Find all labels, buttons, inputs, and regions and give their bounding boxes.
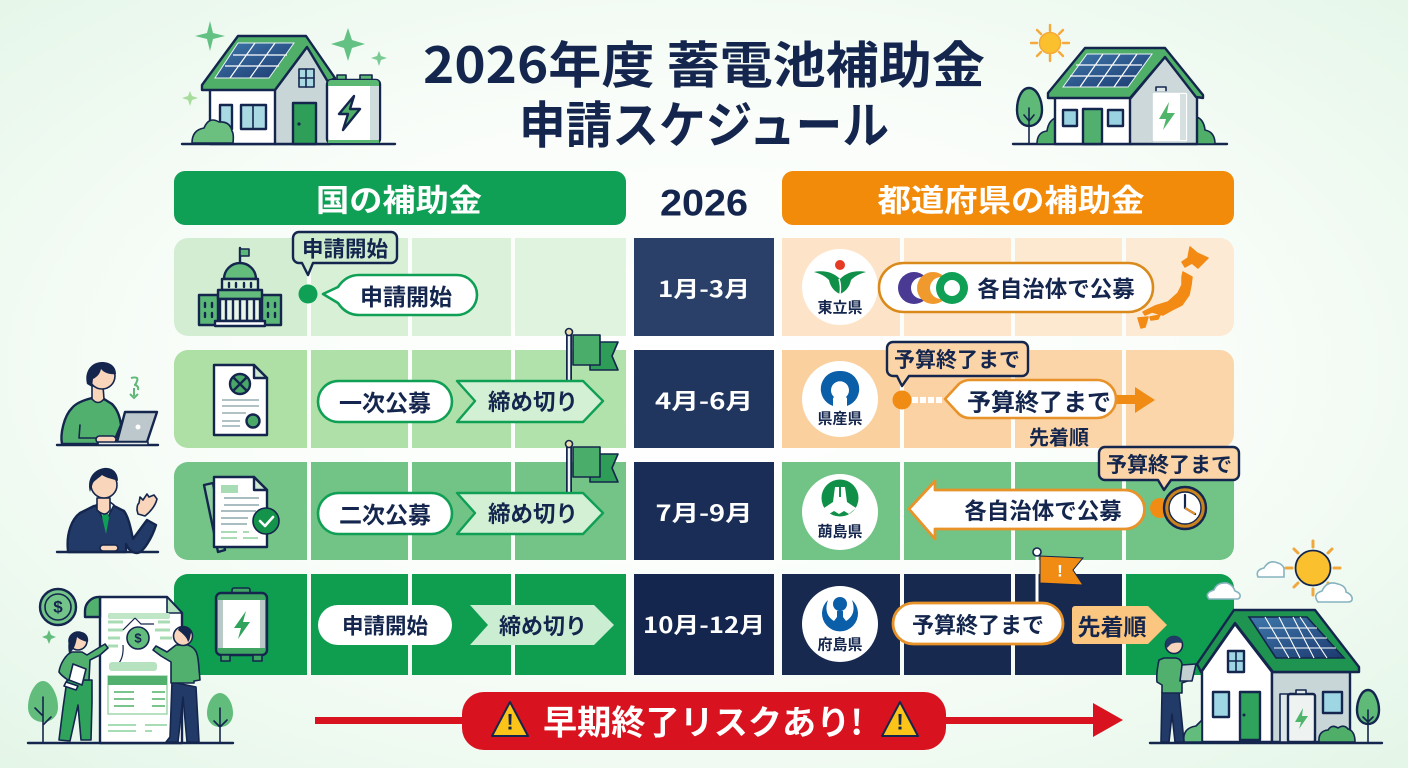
emblem: prefecture 2: 県産県 (817, 408, 863, 428)
label: first come first served: 先着順 (1029, 422, 1089, 450)
callout: until budget ends tooltip: 予算終了まで (894, 344, 1020, 374)
icon: house with solar panels and battery, top left (182, 21, 395, 144)
pill: second round call: 二次公募 (339, 496, 431, 530)
callout: until budget ends tooltip (887, 342, 1028, 386)
title: 2026年度 蓄電池補助金 (423, 26, 985, 98)
callout: application start tooltip: 申請開始 (302, 232, 388, 264)
illustration: person at laptop (57, 362, 158, 445)
flag: second round deadline (566, 440, 618, 493)
emblem: prefecture 4: 府島県 (817, 634, 863, 654)
emblem: prefecture 3: 蓢島県 (817, 520, 863, 542)
panel: month column (634, 238, 774, 675)
chevron: deadline: 締め切り (499, 609, 587, 641)
flag: first round deadline (566, 328, 618, 381)
emblem: prefecture 2 (802, 361, 878, 437)
icon: document with check mark (204, 477, 279, 552)
flag: warning (1033, 548, 1083, 604)
icon: house with solar panels and battery, top right (1013, 25, 1227, 144)
title: 申請スケジュール (519, 86, 889, 158)
illustration: people with subsidy document: $ (53, 598, 63, 616)
header: national subsidy: 国の補助金 (316, 176, 482, 220)
arrow callout: each municipality calls, pointing left: 各自治体で公募 (964, 494, 1122, 526)
chevron: first round deadline: 締め切り (488, 385, 578, 417)
pill: second round call (318, 493, 452, 534)
banner: early termination risk: 早期終了リスクあり! (543, 696, 863, 744)
chevron: deadline (470, 605, 614, 645)
header: prefectural subsidy (782, 171, 1234, 225)
pill: each municipality calls: 各自治体で公募 (977, 272, 1135, 304)
pill: application start: 申請開始 (342, 610, 428, 640)
chevron: second round deadline (457, 493, 603, 534)
callout: until budget ends with arrow (945, 380, 1155, 418)
illustration: sun and clouds (1207, 541, 1352, 602)
chevron: second round deadline: 締め切り (488, 497, 578, 529)
illustration: house with solar panels and person (1150, 610, 1382, 743)
callout: application start (323, 275, 477, 315)
pill: until budget ends: 予算終了まで (912, 608, 1044, 640)
callout: until budget ends with arrow: 予算終了まで (967, 382, 1111, 418)
pill: first round call (318, 381, 452, 422)
chevron: first round deadline (457, 381, 603, 422)
icon: battery (216, 588, 267, 661)
icon: clock (1150, 487, 1206, 529)
illustration: man in suit presenting (57, 468, 158, 553)
header: prefectural subsidy: 都道府県の補助金 (878, 176, 1144, 220)
panel: month column: 1月-3月 (658, 272, 750, 304)
title (423, 26, 985, 158)
illustration: people with subsidy document: $ (134, 630, 142, 646)
emblem: prefecture 1 (802, 249, 878, 325)
panel: national subsidy schedule grid (174, 238, 626, 675)
emblem: prefecture 1: 東立県 (817, 296, 863, 318)
arrow callout: each municipality calls, pointing left (909, 481, 1144, 539)
pill: application start (318, 605, 452, 645)
chip: first come first served (1072, 606, 1167, 644)
header: national subsidy (174, 171, 626, 225)
callout: until budget ends tooltip near clock: 予算終了まで (1106, 449, 1232, 479)
banner: early termination risk: ! (896, 710, 904, 734)
timeline start dot (298, 284, 318, 304)
emblem: prefecture 4 (802, 586, 878, 662)
panel: month column: 4月-6月 (655, 384, 753, 416)
panel: month column: 10月-12月 (643, 608, 765, 640)
pill: first round call: 一次公募 (339, 384, 431, 418)
icon: government building (199, 248, 281, 326)
callout: until budget ends tooltip near clock (1099, 447, 1239, 490)
year heading: 2026 (660, 182, 748, 224)
pill: until budget ends (893, 603, 1063, 644)
pill: each municipality calls (879, 263, 1153, 312)
illustration: people with subsidy document (28, 589, 233, 743)
callout: application start: 申請開始 (360, 278, 452, 312)
timeline start dot with dashes (892, 390, 943, 410)
panel: prefectural subsidy schedule grid (782, 238, 1234, 675)
emblem: prefecture 3 (802, 474, 878, 550)
icon: certificate document (214, 365, 267, 435)
banner: early termination risk (462, 692, 946, 750)
panel: month column: 7月-9月 (656, 496, 752, 528)
flag: warning: ! (1057, 562, 1063, 580)
banner: early termination risk: ! (506, 710, 514, 734)
icon: map of Japan (1138, 247, 1208, 328)
arrow: early termination risk timeline (315, 703, 1123, 737)
chip: first come first served: 先着順 (1078, 608, 1146, 642)
callout: application start tooltip (293, 232, 397, 275)
